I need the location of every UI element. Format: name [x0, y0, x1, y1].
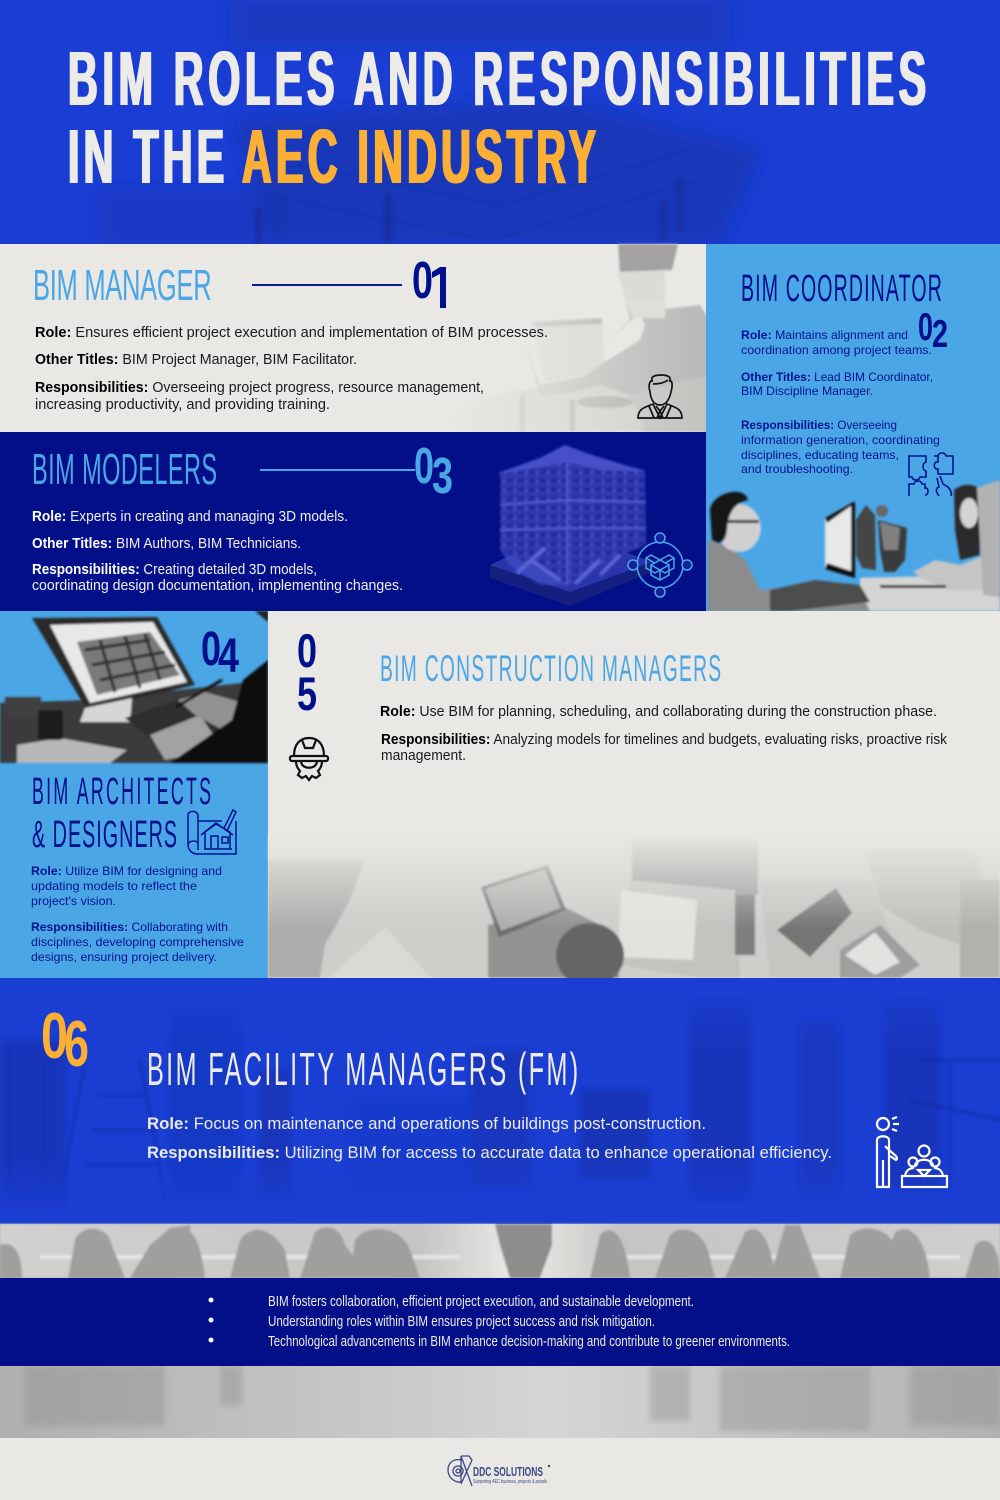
logo: DDC Solutions: [448, 1456, 550, 1486]
number 05: [297, 624, 317, 720]
number 02: 0: [918, 306, 933, 349]
body text: information generation, coordinating: [741, 433, 940, 447]
body text: Role: Use BIM for planning, scheduling, and collaborating during the construction phase.: [380, 704, 937, 720]
number 04: [201, 623, 239, 683]
body text: Role: Ensures efficient project execution and implementation of BIM processes.: [35, 325, 548, 341]
body text: Other Titles: Lead BIM Coordinator,: [741, 370, 933, 384]
image: building model: [490, 445, 652, 606]
title: AEC INDUSTRY: [242, 114, 596, 200]
photo: person at laptop: [440, 244, 708, 432]
body text: Other Titles: BIM Authors, BIM Technicians.: [32, 536, 301, 552]
panel: BIM modelers: [0, 432, 708, 611]
body text: project's vision.: [31, 894, 116, 908]
number 03: [414, 437, 453, 504]
number 06: 6: [64, 1007, 89, 1080]
body text: Responsibilities: Creating detailed 3D models,: [32, 562, 317, 578]
header panel: [0, 0, 1000, 244]
body text: [31, 864, 244, 964]
panel: BIM manager: [0, 244, 708, 432]
icon: cube network: [628, 533, 692, 597]
body text: Role: Utilize BIM for designing and: [31, 864, 222, 878]
body text: coordinating design documentation, implementing changes.: [32, 578, 403, 594]
heading: & DESIGNERS: [32, 814, 177, 856]
photo: team around table: [268, 833, 1000, 987]
title: IN THE: [68, 114, 224, 200]
body text: and troubleshooting.: [741, 462, 853, 476]
body text: Responsibilities: Collaborating with: [31, 920, 228, 934]
icon: manager: [638, 375, 682, 418]
number 05: 0: [297, 624, 317, 677]
body text: disciplines, educating teams,: [741, 448, 899, 462]
panel: summary band: [0, 1278, 1000, 1366]
body text: [380, 704, 948, 764]
body text: [147, 1114, 832, 1162]
body text: designs, ensuring project delivery.: [31, 950, 217, 964]
panel: BIM construction managers: [268, 611, 1000, 987]
panel: BIM facility managers: [0, 978, 1000, 1224]
body text: management.: [381, 748, 466, 764]
body text: Other Titles: BIM Project Manager, BIM Facilitator.: [35, 352, 357, 368]
body text: coordination among project teams.: [741, 343, 932, 357]
panel: BIM coordinator: [706, 244, 1000, 611]
title: [68, 36, 926, 200]
heading: BIM MANAGER: [33, 260, 212, 310]
heading: BIM CONSTRUCTION MANAGERS: [380, 648, 721, 690]
body text: BIM Discipline Manager.: [741, 384, 873, 398]
number 03: 3: [432, 447, 453, 504]
photo: team at computers: [708, 480, 1000, 611]
body text: increasing productivity, and providing training.: [35, 397, 330, 413]
number 02: 2: [932, 313, 948, 356]
title: BIM ROLES AND RESPONSIBILITIES: [68, 36, 926, 122]
body text: Responsibilities: Analyzing models for timelines and budgets, evaluating risks, proactive risk: [381, 732, 948, 748]
photo band: conference room: [0, 1224, 1000, 1438]
heading: BIM FACILITY MANAGERS (FM): [147, 1043, 578, 1095]
heading: BIM ARCHITECTS: [32, 771, 211, 813]
body text: [35, 325, 548, 413]
connector line: [252, 284, 402, 286]
heading: [32, 771, 211, 856]
number 04: 0: [201, 623, 221, 676]
number 04: 4: [218, 630, 239, 683]
number 06: [41, 999, 89, 1080]
body text: Responsibilities: Overseeing project progress, resource management,: [35, 380, 484, 396]
icon: speaker and audience: [877, 1117, 947, 1187]
connector line: [260, 469, 415, 471]
logo: DDC Solutions: DDC SOLUTIONS: [473, 1465, 543, 1479]
icon: blueprint: [188, 810, 236, 854]
bullet list: [208, 1294, 790, 1350]
body text: updating models to reflect the: [31, 879, 197, 893]
body text: Role: Focus on maintenance and operations of buildings post-construction.: [147, 1114, 706, 1133]
body text: Responsibilities: Utilizing BIM for access to accurate data to enhance operational efficiency.: [147, 1143, 832, 1162]
body text: Role: Maintains alignment and: [741, 328, 908, 342]
number 02: [918, 306, 948, 356]
number 03: 0: [414, 437, 434, 494]
footer: [0, 1438, 1000, 1500]
number 01: 0: [412, 252, 433, 310]
bullet list: Understanding roles within BIM ensures project success and risk mitigation.: [268, 1314, 655, 1330]
photo: construction site tint: [0, 978, 1000, 1224]
body text: [32, 509, 403, 594]
icon: puzzle and hand: [909, 453, 953, 496]
bullet list: BIM fosters collaboration, efficient project execution, and sustainable development.: [268, 1294, 694, 1310]
body text: Responsibilities: Overseeing: [741, 418, 897, 432]
number 05: 5: [297, 667, 317, 720]
body text: [741, 328, 940, 476]
number 06: 0: [41, 999, 68, 1072]
bullet list: Technological advancements in BIM enhance decision-making and contribute to greener environments.: [268, 1334, 790, 1350]
photo: tablet and monitor: [0, 611, 268, 763]
heading: BIM COORDINATOR: [741, 268, 942, 310]
panel: BIM architects and designers: [0, 611, 268, 978]
logo: DDC Solutions: Supporting AEC business, projects & people: [473, 1479, 547, 1485]
icon: helmet and gear: [290, 738, 328, 780]
body text: disciplines, developing comprehensive: [31, 935, 244, 949]
body text: Role: Experts in creating and managing 3D models.: [32, 509, 348, 525]
heading: BIM MODELERS: [32, 445, 217, 494]
